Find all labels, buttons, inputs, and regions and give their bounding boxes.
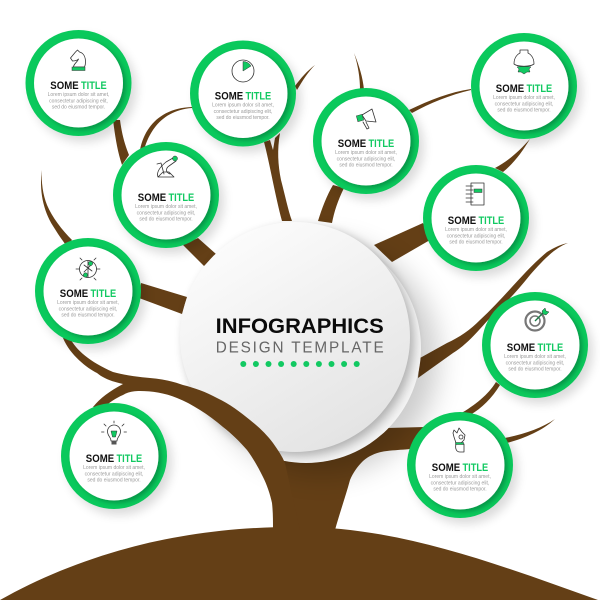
text: sed do eiusmod tempor.: [508, 367, 562, 373]
icon: hand: [453, 428, 465, 452]
text: consectetur adipiscing elit,: [214, 109, 272, 115]
text: sed do eiusmod tempor.: [139, 217, 193, 223]
text: [445, 227, 507, 246]
twig notebook to helmet: [495, 139, 530, 172]
panel: chess: TITLE: [81, 80, 107, 92]
panel: hand: TITLE: [462, 462, 488, 474]
panel: clock: TITLE: [246, 90, 271, 102]
text: sed do eiusmod tempor.: [216, 115, 270, 121]
panel: megaphone: [313, 88, 424, 200]
text: sed do eiusmod tempor.: [61, 313, 115, 319]
text: consectetur adipiscing elit,: [49, 98, 108, 104]
title: SOME: [138, 192, 166, 204]
icon: brain: [76, 258, 100, 280]
icon: chess knight: [70, 50, 86, 70]
title: SOME: [215, 90, 243, 102]
branch right of brain circle: [139, 283, 187, 314]
dotted row: [240, 361, 360, 367]
text: consectetur adipiscing elit,: [506, 360, 564, 366]
text: Lorem ipsum dolor sit amet,: [212, 102, 274, 108]
title: SOME: [338, 138, 366, 150]
icon: microscope: [157, 156, 178, 177]
text: sed do eiusmod tempor.: [339, 163, 393, 169]
text: [83, 465, 145, 484]
branch to hand circle: [460, 382, 500, 415]
title: SOME: [507, 342, 535, 354]
hill: [0, 527, 598, 600]
title: SOME: [448, 215, 476, 227]
trunk behind disc: [273, 427, 425, 530]
panel: notebook: [423, 165, 534, 277]
text: Lorem ipsum dolor sit amet,: [445, 227, 507, 233]
icon: bulb: [102, 421, 126, 444]
central circle: [180, 222, 438, 474]
icon: megaphone: [356, 109, 376, 129]
text: consectetur adipiscing elit,: [59, 306, 117, 312]
icon: helmet: [514, 50, 534, 74]
text: Lorem ipsum dolor sit amet,: [135, 204, 197, 210]
branch to target circle: [418, 243, 568, 378]
panel: brain: TITLE: [90, 288, 116, 300]
panel: target: TITLE: [538, 342, 563, 354]
text: Lorem ipsum dolor sit amet,: [504, 354, 566, 360]
title: SOME: [60, 288, 88, 300]
twig right of clock: [295, 65, 315, 90]
text: sed do eiusmod tempor.: [497, 108, 551, 114]
panel: brain: [35, 238, 146, 350]
panel: helmet: [471, 33, 582, 145]
twig megaphone to helmet: [409, 89, 471, 113]
icon: target: [526, 308, 549, 330]
panel: chess: [26, 30, 136, 142]
icon: clock: [232, 60, 254, 82]
text: [135, 204, 197, 223]
panel: helmet: TITLE: [526, 83, 552, 95]
subheading: DESIGN TEMPLATE: [216, 340, 384, 357]
text: Lorem ipsum dolor sit amet,: [83, 465, 145, 471]
main left branch over disc: [63, 338, 300, 530]
text: [504, 354, 566, 373]
branch to notebook circle: [374, 223, 430, 262]
text: Lorem ipsum dolor sit amet,: [493, 95, 555, 101]
text: Lorem ipsum dolor sit amet,: [48, 92, 109, 98]
title: SOME: [496, 83, 524, 95]
text: [493, 95, 555, 114]
heading: INFOGRAPHICS: [216, 315, 384, 338]
text: sed do eiusmod tempor.: [52, 105, 105, 111]
text: consectetur adipiscing elit,: [495, 101, 553, 107]
text: sed do eiusmod tempor.: [433, 487, 487, 493]
panel: light bulb: TITLE: [116, 453, 142, 465]
branch to clock circle: [264, 133, 292, 221]
title: SOME: [432, 462, 460, 474]
panel: microscope: [113, 142, 224, 254]
text: Lorem ipsum dolor sit amet,: [57, 300, 119, 306]
branch to megaphone: [318, 185, 344, 223]
icon: notebook: [466, 183, 484, 205]
long tip left: [41, 170, 72, 245]
text: [48, 92, 109, 111]
panel: target: [482, 292, 593, 404]
branch to chess circle: [113, 120, 129, 165]
title: SOME: [86, 453, 114, 465]
text: consectetur adipiscing elit,: [137, 210, 195, 216]
text: consectetur adipiscing elit,: [85, 471, 143, 477]
text: sed do eiusmod tempor.: [87, 478, 141, 484]
tip right of hand circle: [505, 419, 555, 443]
title: SOME: [50, 80, 79, 92]
text: [212, 102, 274, 121]
text: sed do eiusmod tempor.: [449, 240, 503, 246]
text: consectetur adipiscing elit,: [431, 480, 489, 486]
panel: light bulb: [61, 403, 172, 515]
branch from microscope circle: [183, 238, 216, 266]
panel: hand: [407, 412, 518, 524]
panel: megaphone: TITLE: [368, 138, 394, 150]
text: [335, 150, 397, 169]
text: [429, 474, 491, 493]
thin arc branch: [140, 107, 192, 150]
front disc: [180, 222, 410, 452]
text: Lorem ipsum dolor sit amet,: [335, 150, 397, 156]
text: [57, 300, 119, 319]
twig top: [354, 53, 364, 90]
text: consectetur adipiscing elit,: [447, 233, 505, 239]
text: consectetur adipiscing elit,: [337, 156, 395, 162]
panel: clock: [190, 40, 301, 152]
panel: microscope: TITLE: [168, 192, 194, 204]
text: Lorem ipsum dolor sit amet,: [429, 474, 491, 480]
heading: [216, 315, 384, 357]
panel: notebook: TITLE: [478, 215, 504, 227]
back disc: [191, 233, 421, 463]
